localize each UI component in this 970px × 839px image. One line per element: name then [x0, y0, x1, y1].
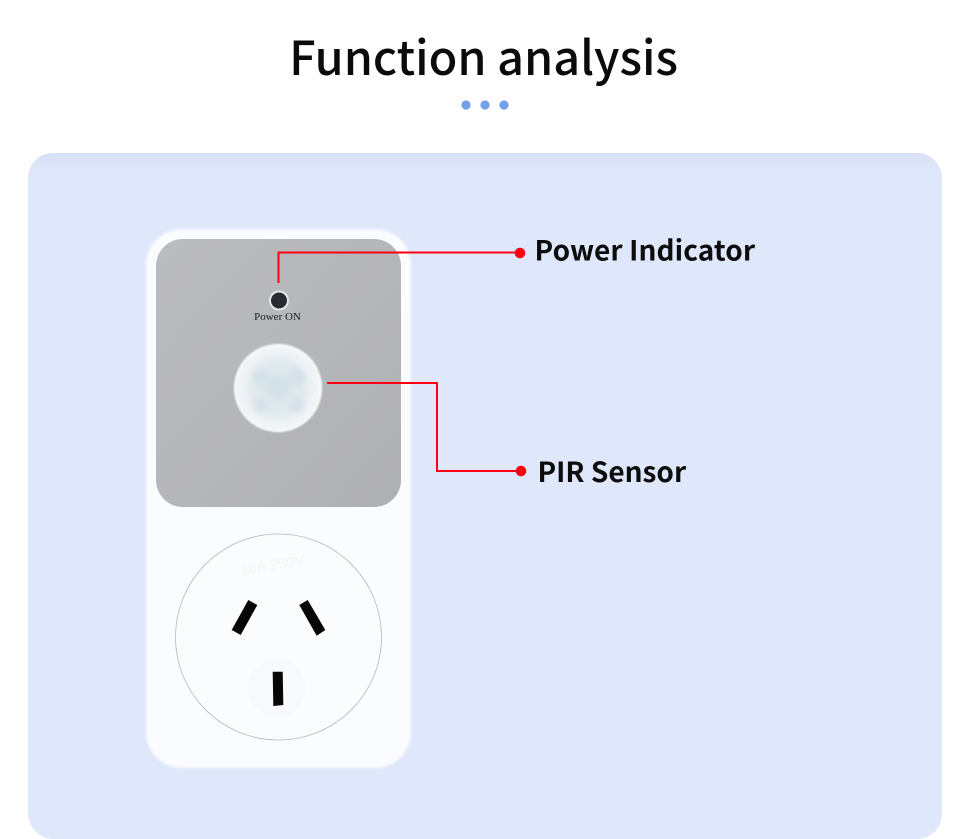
callout label: PIR sensor: PIR Sensor [538, 451, 687, 491]
title: Function analysis [289, 22, 678, 89]
callout line: power indicator [278, 248, 525, 283]
slot: right [299, 600, 325, 636]
outlet faceplate [176, 534, 382, 740]
callout line: PIR sensor [327, 383, 526, 476]
sensor plate [156, 239, 401, 507]
socket body [146, 229, 411, 768]
icon: power LED [269, 290, 289, 310]
callout label: power indicator: Power Indicator [534, 230, 756, 270]
slot: left [232, 600, 257, 635]
title dots [461, 100, 509, 110]
icon: PIR lens [234, 344, 322, 432]
outlet rating text: 10A 250V [239, 553, 306, 578]
LED label: Power ON [254, 311, 301, 323]
earth pin recess [248, 659, 306, 717]
product: smart socket [146, 229, 411, 768]
panel: light blue background [28, 153, 942, 839]
slot: earth [273, 672, 283, 706]
